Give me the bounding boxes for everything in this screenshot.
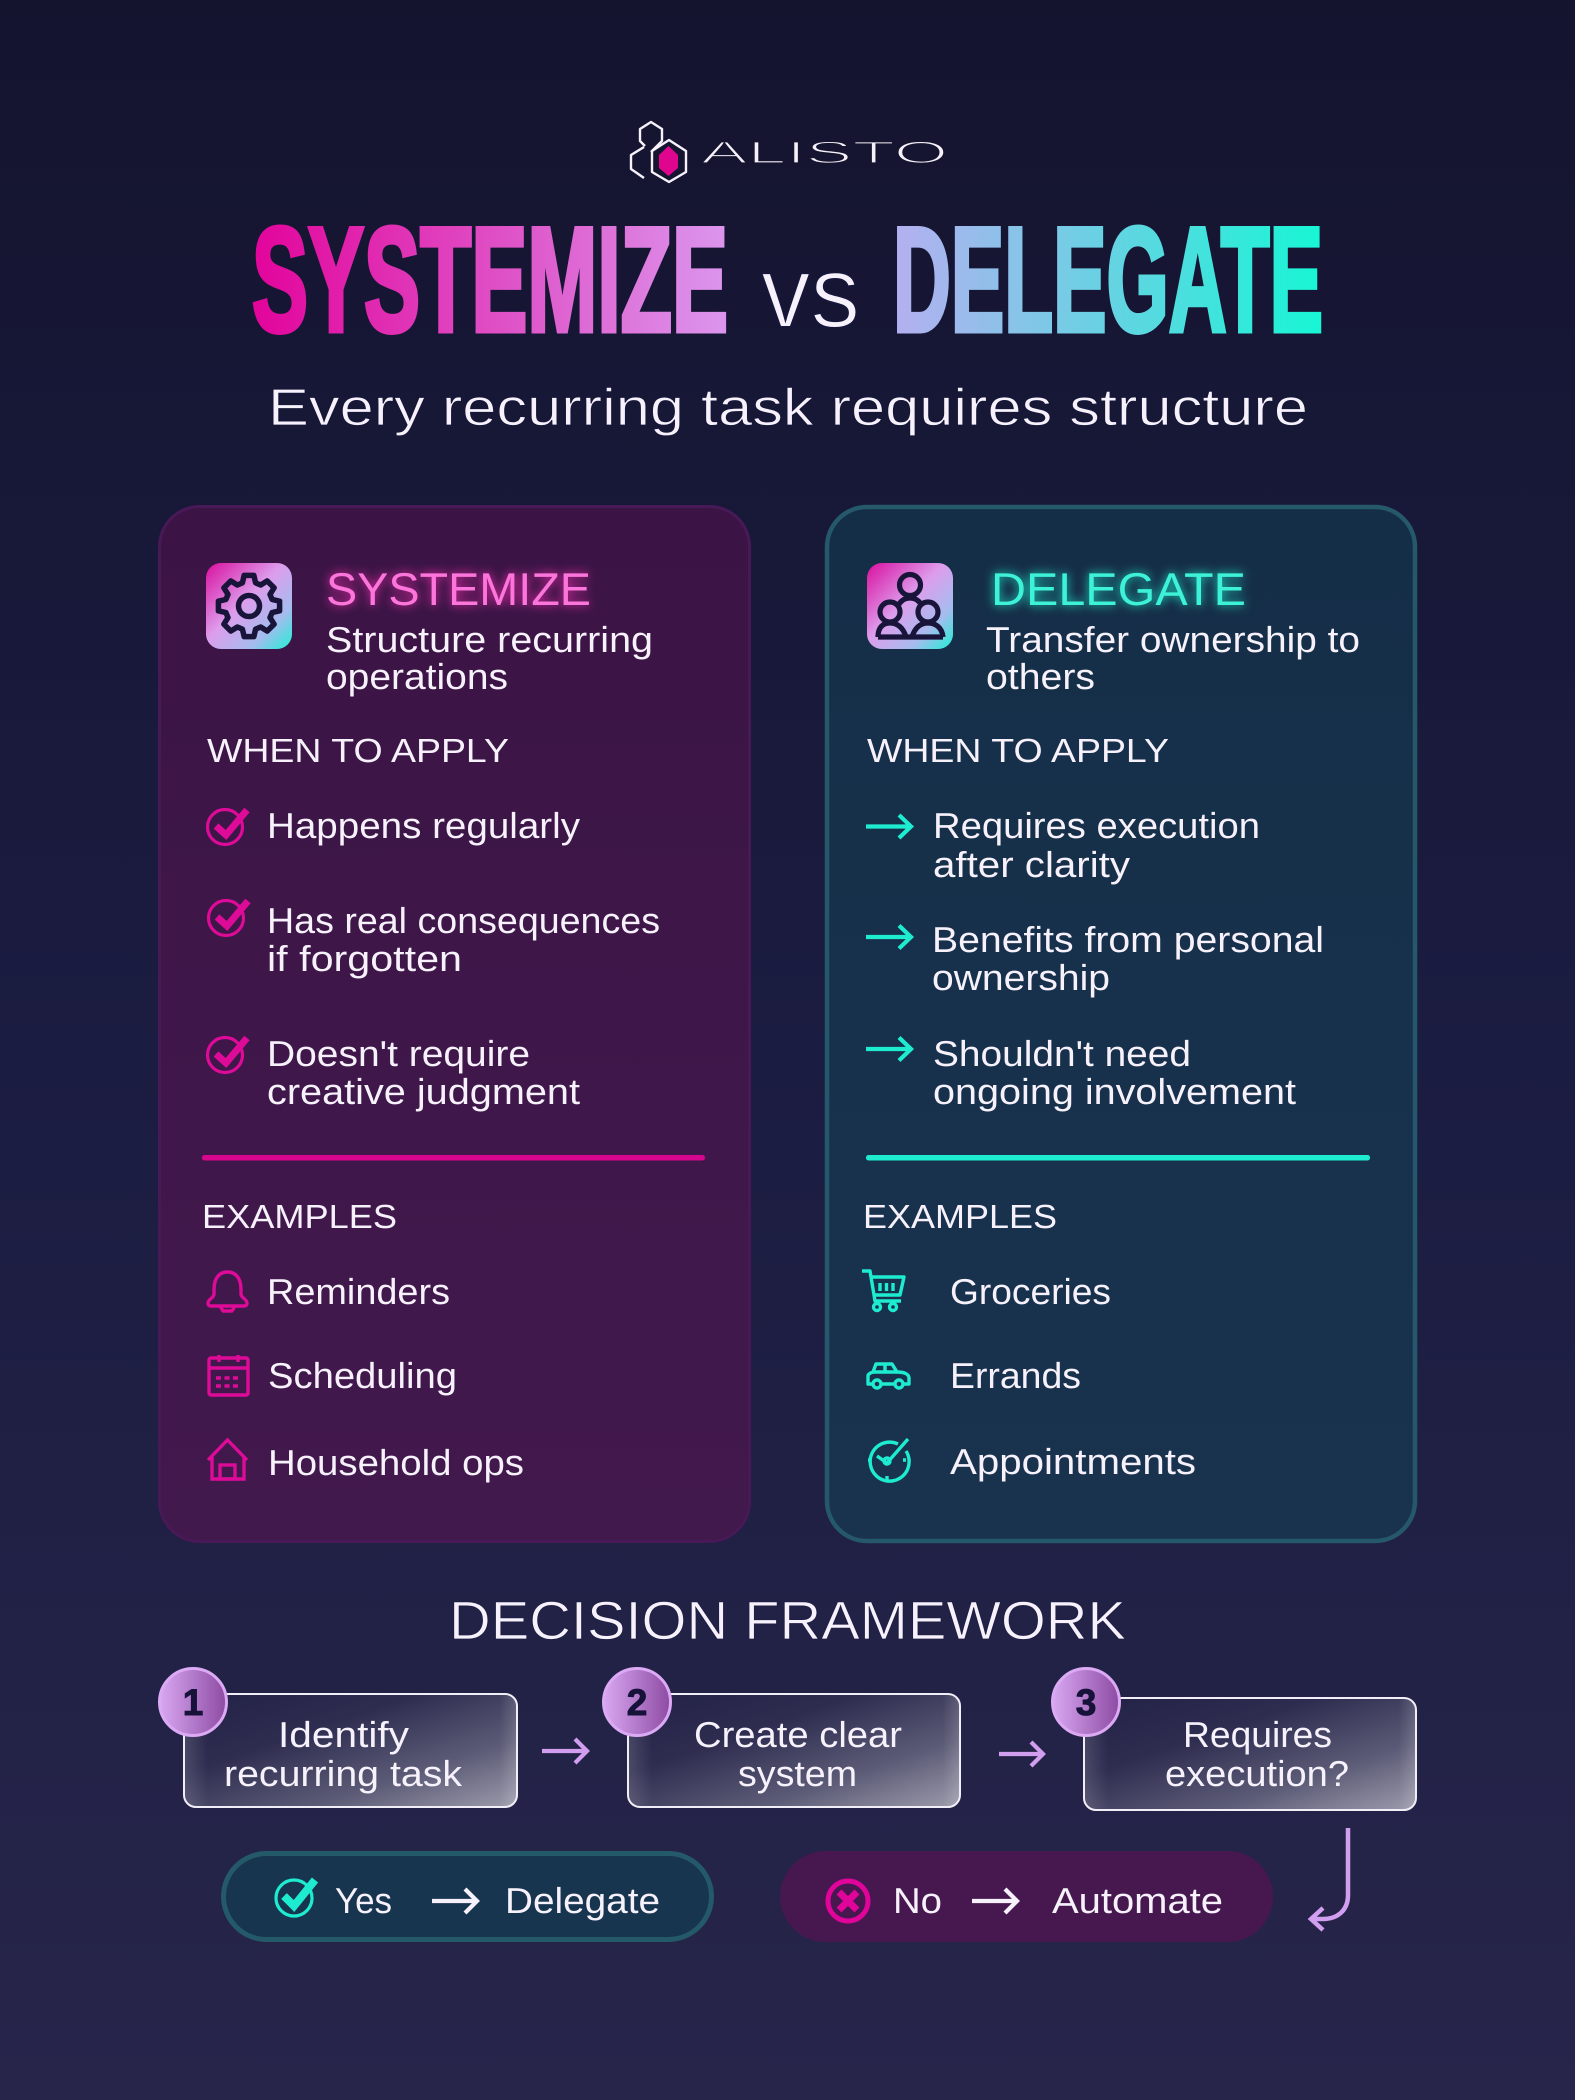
- panel: delegate: [827, 507, 1415, 1541]
- text: system: [738, 1753, 857, 1794]
- title word: SYSTEMIZE: SYSTEMIZE: [252, 196, 728, 363]
- label: no: No: [893, 1880, 942, 1921]
- description: operations: [326, 656, 508, 697]
- arrow: step 3 down to outcome: [1311, 1828, 1348, 1930]
- text: [1165, 1714, 1349, 1794]
- step 1: identify recurring task: [160, 1668, 517, 1807]
- title word: vs: vs: [761, 235, 860, 349]
- label: yes: Yes: [335, 1880, 392, 1921]
- example: appointments: Appointments: [950, 1441, 1196, 1482]
- logo: Alisto: [631, 122, 948, 182]
- arrow: step 2 to 3: [999, 1742, 1043, 1766]
- badge: 3: [1052, 1668, 1120, 1736]
- item: no creative judgment: creative judgment: [267, 1071, 580, 1112]
- badge: 1: 1: [183, 1682, 203, 1723]
- item: no ongoing involvement: [866, 1033, 1296, 1112]
- badge: 1: [160, 1668, 226, 1736]
- text: Create clear: [694, 1714, 902, 1755]
- heading: DELEGATE: DELEGATE: [991, 563, 1246, 615]
- item: no creative judgment: Doesn't require: [267, 1033, 530, 1074]
- icon: check: [276, 1880, 315, 1916]
- description: others: [986, 656, 1095, 697]
- text: [694, 1714, 902, 1794]
- description: Transfer ownership to: [986, 619, 1360, 660]
- text: Requires: [1183, 1714, 1332, 1755]
- text: execution?: [1165, 1753, 1349, 1794]
- icon: cross: [828, 1881, 868, 1921]
- badge: 2: [604, 1668, 670, 1736]
- outcome pill: no automate: [780, 1851, 1273, 1942]
- item: personal ownership: ownership: [932, 957, 1110, 998]
- description: [986, 619, 1360, 697]
- wordmark: ALISTO: [701, 135, 948, 170]
- arrow: [972, 1889, 1017, 1913]
- example: reminders: Reminders: [267, 1271, 450, 1312]
- example: errands: Errands: [950, 1355, 1081, 1396]
- step 2: create clear system: [604, 1668, 960, 1807]
- item: no ongoing involvement: ongoing involvement: [933, 1071, 1296, 1112]
- label: automate: Automate: [1052, 1880, 1223, 1921]
- example: household ops: Household ops: [268, 1442, 524, 1483]
- panel: systemize: [160, 506, 750, 1542]
- badge: 3: 3: [1076, 1682, 1096, 1723]
- item: personal ownership: [866, 919, 1324, 998]
- heading: when to apply: WHEN TO APPLY: [867, 733, 1169, 770]
- text: recurring task: [224, 1753, 463, 1794]
- arrow: [432, 1889, 477, 1913]
- icon: team: [867, 563, 953, 649]
- item: requires execution: Requires execution: [933, 805, 1260, 846]
- item: no creative judgment: [208, 1033, 580, 1112]
- text: Identify: [278, 1714, 409, 1755]
- description: [326, 619, 653, 697]
- step 3: requires execution: [1052, 1668, 1416, 1810]
- item: real consequences: [208, 900, 660, 979]
- badge: 2: 2: [627, 1682, 647, 1723]
- heading: SYSTEMIZE: SYSTEMIZE: [326, 563, 591, 615]
- item: real consequences: if forgotten: [267, 938, 462, 979]
- item: happens regularly: Happens regularly: [267, 805, 580, 846]
- example: groceries: Groceries: [950, 1271, 1111, 1312]
- description: Structure recurring: [326, 619, 653, 660]
- text: [224, 1714, 463, 1794]
- example: groceries: [862, 1271, 1111, 1312]
- label: delegate: Delegate: [505, 1880, 660, 1921]
- outcome pill: yes delegate: [224, 1854, 712, 1940]
- item: no ongoing involvement: Shouldn't need: [933, 1033, 1191, 1074]
- heading: examples: EXAMPLES: [202, 1199, 397, 1236]
- heading: examples: EXAMPLES: [863, 1199, 1057, 1236]
- icon: hexagon logo mark: [631, 122, 686, 182]
- heading: decision framework: DECISION FRAMEWORK: [449, 1591, 1126, 1651]
- arrow: step 1 to 2: [542, 1739, 587, 1763]
- icon: gear: [206, 563, 292, 649]
- item: requires execution: after clarity: [933, 844, 1130, 885]
- item: personal ownership: Benefits from personal: [932, 919, 1324, 960]
- example: errands: [868, 1355, 1081, 1396]
- heading: when to apply: WHEN TO APPLY: [207, 733, 509, 770]
- example: appointments: [868, 1439, 1196, 1482]
- subtitle: Every recurring task requires structure: [268, 379, 1308, 437]
- item: real consequences: Has real consequences: [267, 900, 660, 941]
- example: scheduling: Scheduling: [268, 1355, 457, 1396]
- item: requires execution: [866, 805, 1260, 885]
- title: [252, 196, 1323, 363]
